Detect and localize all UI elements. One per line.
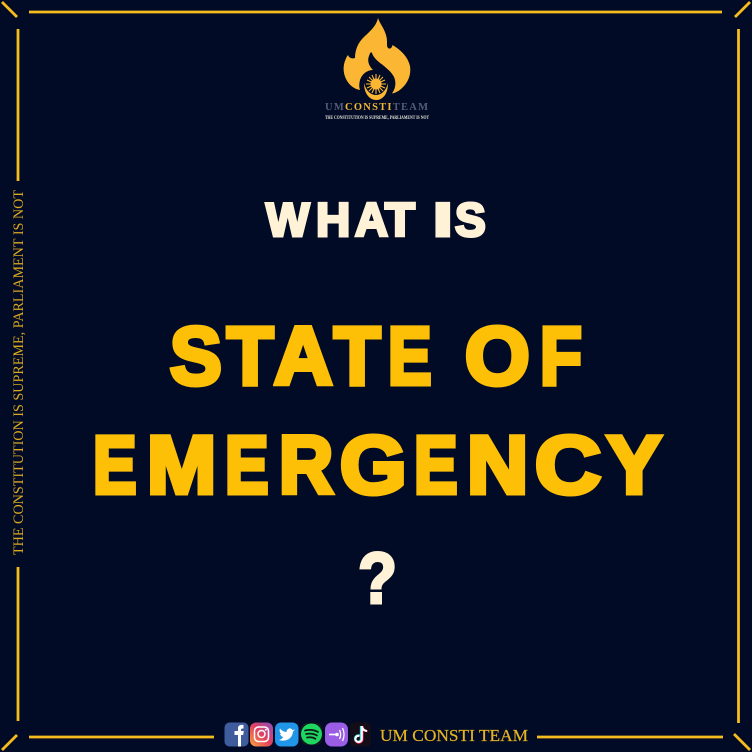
heading: emergency: E bbox=[414, 420, 457, 511]
logo tagline: THE CONSTITUTION IS SUPREME, PARLIAMENT IS NOT bbox=[325, 115, 429, 121]
heading: emergency: R bbox=[279, 420, 333, 511]
heading: state of: F bbox=[540, 311, 582, 402]
heading: state of: E bbox=[388, 311, 431, 402]
heading: what is: T bbox=[385, 193, 415, 246]
icon: tiktok bbox=[350, 722, 371, 746]
heading: emergency: M bbox=[147, 420, 216, 511]
social icons row bbox=[224, 722, 371, 746]
heading: what is: W bbox=[266, 193, 310, 246]
heading: what is: I bbox=[433, 193, 452, 246]
question mark: ? bbox=[358, 539, 397, 619]
icon: crescent bbox=[364, 83, 388, 100]
vertical motto: THE CONSTITUTION IS SUPREME, PARLIAMENT IS NOT bbox=[11, 190, 27, 555]
logo bbox=[325, 18, 429, 121]
heading: what is bbox=[264, 193, 486, 246]
heading: what is: S bbox=[455, 193, 486, 246]
heading: state of: T bbox=[227, 311, 273, 402]
logo wordmark: UMCONSTITEAM bbox=[325, 102, 428, 113]
icon: spotify bbox=[301, 723, 322, 745]
footer brand text: UM CONSTI TEAM bbox=[380, 726, 528, 745]
icon: twitter bbox=[275, 722, 298, 746]
heading: emergency bbox=[93, 420, 664, 511]
icon: instagram bbox=[250, 722, 273, 746]
heading: emergency: E bbox=[225, 420, 268, 511]
heading: state of: S bbox=[170, 311, 221, 402]
heading: what is: A bbox=[355, 193, 388, 246]
heading: state of: O bbox=[465, 311, 529, 402]
icon: facebook bbox=[224, 722, 248, 746]
heading: emergency: G bbox=[340, 420, 406, 511]
heading: state of bbox=[169, 311, 582, 402]
heading: emergency: E bbox=[93, 420, 136, 511]
icon: sun bbox=[366, 74, 386, 94]
icon: podcast bbox=[325, 722, 348, 746]
heading: emergency: Y bbox=[607, 420, 661, 511]
heading: state of: T bbox=[334, 311, 380, 402]
heading: emergency: N bbox=[467, 420, 528, 511]
icon: flame bbox=[344, 18, 410, 94]
heading: emergency: C bbox=[535, 420, 601, 511]
heading: state of: A bbox=[274, 311, 332, 402]
heading: what is: H bbox=[316, 193, 350, 246]
